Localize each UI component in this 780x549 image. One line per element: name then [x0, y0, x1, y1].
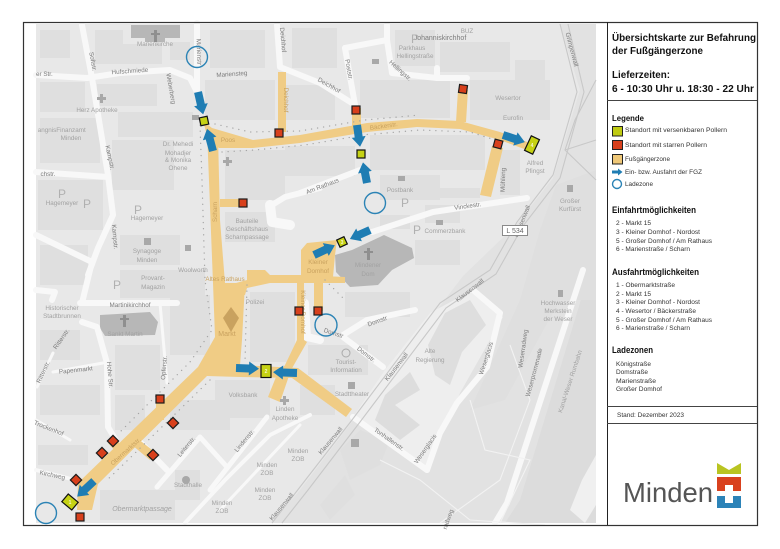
map labels: Leiterstr.	[176, 435, 197, 459]
legend: retractable bollard: Standort mit versenkbaren Pollern	[625, 127, 727, 134]
map labels: der Weser	[544, 316, 572, 323]
title: der Fußgängerzone	[612, 45, 703, 57]
map labels: Stadttheater	[335, 391, 369, 398]
map labels: Klausenwall	[513, 205, 532, 238]
title: Übersichtskarte zur Befahrung	[612, 31, 756, 44]
map labels: Regierung	[415, 357, 445, 364]
map labels: Dom	[361, 271, 375, 278]
Kleiner Domhof south	[268, 283, 307, 402]
map labels: Hellingstr.	[387, 59, 413, 83]
map labels: Trockenhof	[33, 420, 65, 438]
map labels: Pfingst	[525, 168, 545, 175]
map labels: Kleiner Domhof	[299, 290, 306, 334]
exit options: 2 - Markt 15	[616, 291, 651, 298]
map labels: chstr.	[40, 171, 56, 178]
map labels: Domstr	[323, 327, 344, 340]
retractable bollard markers	[62, 116, 539, 510]
map labels: Alfred	[527, 160, 544, 167]
pedestrian zone	[77, 72, 530, 510]
map labels: Vinckestr.	[454, 201, 482, 212]
map labels: Marienstr	[195, 39, 202, 65]
bollard numbers: 1	[69, 500, 72, 506]
map labels: Sankt Martin	[107, 331, 143, 338]
map labels: Volksbank	[229, 392, 258, 399]
legend: arrow: Ein- bzw. Ausfahrt der FGZ	[625, 169, 702, 176]
map labels: Dr. Mehedi	[163, 141, 193, 148]
entry options: 2 - Markt 15	[616, 220, 651, 227]
map labels: Eurofin	[503, 115, 523, 122]
map labels: Markt	[218, 331, 236, 338]
map labels: Kurfürst	[559, 206, 581, 213]
Markt and Obermarktstraße	[77, 283, 298, 510]
map labels: Weberberg	[164, 73, 177, 105]
map labels: Historischer	[45, 305, 79, 312]
map labels: Obermarktpassage	[112, 506, 172, 513]
exit options: 5 - Großer Domhof / Am Rathaus	[616, 317, 713, 324]
map labels: Hohe Str.	[105, 361, 114, 388]
street furniture dots	[105, 115, 505, 482]
Scharn	[207, 130, 225, 283]
buildings	[38, 28, 550, 520]
bollard numbers	[69, 143, 534, 506]
road sign L 534: L 534	[506, 228, 524, 235]
map labels: Weserpromenade	[525, 347, 545, 398]
map labels: Domstr	[367, 315, 388, 328]
map labels: Opferstr.	[160, 355, 169, 380]
map labels: Finanzamt	[56, 127, 86, 134]
date note: Stand: Dezember 2023	[617, 412, 684, 419]
map labels: Hochwasser	[541, 300, 575, 307]
map labels: Obermarktstr.	[109, 436, 143, 467]
map labels: Klausenwall	[384, 352, 410, 382]
delivery times: 6 - 10:30 Uhr u. 18:30 - 22 Uhr	[612, 83, 754, 95]
road sign L 534	[502, 226, 528, 236]
legend	[612, 113, 727, 188]
map labels: Kanal-Weser Rumbahn	[557, 349, 584, 414]
Kleiner Domhof	[301, 240, 337, 277]
bollard numbers: 3	[341, 240, 344, 246]
exit options	[612, 267, 713, 332]
map labels: Kampstr.	[103, 145, 116, 171]
map labels: Commerzbank	[425, 228, 466, 235]
map labels: ZOB	[261, 470, 273, 477]
legend: loading zone: Ladezone	[625, 181, 653, 188]
churches	[100, 25, 414, 336]
map labels: Mohadjer	[165, 150, 191, 157]
map labels: Merkstein	[544, 308, 572, 315]
legend: fixed bollard: Standort mit starren Pollern	[625, 142, 707, 149]
map labels: radweg	[442, 508, 456, 530]
map labels: Tourist-	[336, 359, 356, 366]
bollard numbers: 2	[265, 369, 268, 375]
map labels: Poststr.	[343, 59, 354, 81]
map labels: Klausenwall	[455, 278, 485, 304]
bollard numbers: 4	[531, 143, 534, 149]
map labels: Ohene	[169, 165, 188, 172]
entry options: 5 - Großer Domhof / Am Rathaus	[616, 238, 713, 245]
title	[612, 31, 756, 57]
map labels: Johanniskirchhof	[414, 35, 466, 42]
map labels: Altes Rathaus	[205, 276, 245, 283]
map labels: Weserglacis	[413, 433, 438, 465]
map labels: Poos	[221, 137, 235, 144]
map labels: Deichhof	[282, 88, 289, 113]
delivery times: Lieferzeiten:	[612, 69, 670, 81]
map labels: Klausenwall	[317, 426, 344, 456]
map labels: angnis	[38, 127, 56, 134]
map labels: Hufschmiede	[111, 67, 149, 76]
map labels: Hagemeyer	[46, 200, 78, 207]
map labels: Provant-	[141, 275, 165, 282]
map labels: Information	[330, 367, 362, 374]
map labels: Hagemeyer	[131, 215, 163, 222]
map labels: P	[401, 196, 409, 210]
map labels: ZOB	[292, 456, 304, 463]
map labels: Weserradweg	[517, 329, 530, 368]
loading zones list: Großer Domhof	[616, 386, 662, 393]
map labels	[33, 27, 584, 530]
map labels: Deichhof	[316, 76, 341, 95]
map labels: Minden	[288, 448, 309, 455]
exit options: 4 - Wesertor / Bäckerstraße	[616, 308, 696, 315]
map labels: Magazin	[141, 284, 165, 291]
Bäckerstraße and Poos	[203, 119, 530, 150]
entry options: Einfahrtmöglichkeiten	[612, 205, 696, 215]
map labels: Minden	[255, 487, 276, 494]
map labels: ZOB	[216, 508, 228, 515]
map labels: Bauteile	[236, 218, 259, 225]
loading zone circles	[36, 46, 386, 524]
map labels: Geschäftshaus	[226, 226, 268, 233]
delivery times	[612, 69, 754, 95]
map labels: P	[83, 197, 91, 211]
loading zones list: Domstraße	[616, 369, 648, 376]
map labels: Synagoge	[133, 248, 162, 255]
map labels: Stadtbrunnen	[43, 313, 81, 320]
map labels: Domstr.	[355, 345, 377, 364]
exit options: 1 - Obermarktstraße	[616, 282, 675, 289]
map labels: Grimpenwall	[564, 32, 579, 67]
map labels: & Monika	[165, 157, 192, 164]
loading zones list: Königstraße	[616, 361, 651, 368]
legend: pedestrian zone: Fußgängerzone	[625, 156, 670, 163]
exit options: 6 - Marienstraße / Scharn	[616, 325, 690, 332]
map labels: Herz Apotheke	[76, 107, 118, 114]
map labels: P	[134, 203, 142, 217]
entry options: 6 - Marienstraße / Scharn	[616, 246, 690, 253]
legend: Legende	[612, 113, 644, 123]
map labels: Ritterstr.	[36, 360, 52, 384]
map labels: P	[413, 223, 421, 237]
map labels: Kampstr.	[110, 224, 119, 250]
map labels: Papenmarkt	[59, 365, 93, 376]
map labels: er Str.	[36, 71, 53, 78]
map labels: Scharn	[212, 202, 219, 222]
map labels: Kleiner	[308, 259, 328, 266]
map labels: Polizei	[246, 299, 264, 306]
map labels: Klausenwall	[268, 492, 295, 522]
map labels: Minden	[61, 135, 82, 142]
map labels: Postbank	[387, 187, 414, 194]
map labels: Wesertor	[495, 95, 521, 102]
map labels: Parkhaus	[399, 45, 425, 52]
map labels: BUZ	[461, 28, 473, 35]
east green areas and river	[272, 24, 596, 523]
map labels: Minden	[212, 500, 233, 507]
map labels: Großer	[560, 198, 580, 205]
map labels: Alte	[425, 348, 436, 355]
map labels: Mühleng	[500, 167, 507, 192]
map labels: P	[58, 187, 66, 201]
map labels: Hellingstraße	[396, 53, 434, 60]
loading zones list	[612, 345, 662, 393]
map labels: Mariensteg	[216, 70, 248, 79]
map panel	[33, 23, 596, 530]
map labels: Weserglacis	[478, 341, 495, 376]
entry options	[612, 205, 713, 253]
exit options: Ausfahrtmöglichkeiten	[612, 267, 699, 277]
map labels: Mindener	[355, 262, 381, 269]
map labels: Domhof	[307, 268, 329, 275]
entry options: 3 - Kleiner Domhof - Nordost	[616, 229, 700, 236]
map labels: Stadthalle	[174, 482, 202, 489]
map labels: Scharnpassage	[225, 234, 269, 241]
map labels: Apotheke	[272, 415, 299, 422]
roads	[36, 23, 583, 523]
Altes Rathaus band	[225, 270, 345, 295]
map labels: Minden	[257, 462, 278, 469]
map labels: Bäckerstr.	[369, 121, 398, 132]
map labels: Softstr.	[87, 51, 98, 72]
entry and exit arrows	[72, 90, 527, 502]
map labels: Woolworth	[178, 267, 208, 274]
Klausenwall and Grimpenwall ring road	[272, 24, 596, 525]
map icons	[97, 30, 573, 484]
map labels: P	[411, 32, 419, 46]
map labels: P	[113, 278, 121, 292]
map labels: Martinikirchhof	[110, 302, 151, 309]
Marktplatz diamond	[223, 307, 239, 332]
map labels: Minden	[137, 257, 158, 264]
map labels: Marienkirche	[137, 41, 174, 48]
exit options: 3 - Kleiner Domhof - Nordost	[616, 299, 700, 306]
loading zones list: Ladezonen	[612, 345, 653, 355]
map labels: Linden	[276, 406, 295, 413]
loading zones list: Marienstraße	[616, 378, 656, 385]
map labels: ZOB	[259, 495, 271, 502]
map labels: Lindenstr.	[233, 428, 256, 454]
map labels: Ritterstr.	[52, 327, 72, 351]
Minden logo	[623, 463, 741, 508]
map labels: Deichhof	[278, 27, 287, 53]
fixed bollard markers	[70, 84, 503, 521]
map labels: Am Rathaus	[305, 177, 340, 196]
map labels: Tonhallenstr.	[372, 427, 406, 453]
map labels: Kirchweg	[39, 469, 66, 482]
Minden logo: Minden	[623, 477, 713, 508]
